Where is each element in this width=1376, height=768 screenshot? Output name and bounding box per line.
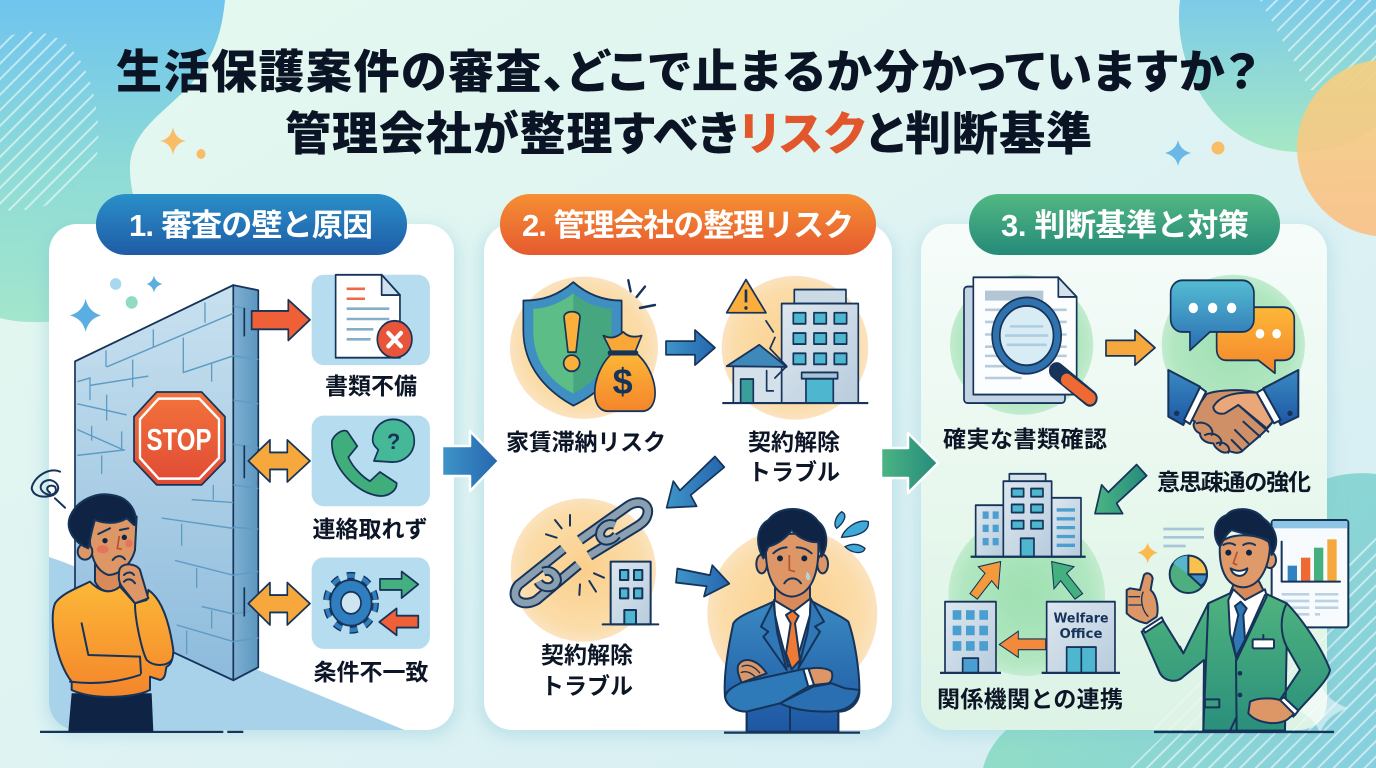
panel: 1 wall and causes [32,194,458,736]
decorative sparkles [160,127,1224,166]
double arrow: wall to phone [248,440,310,482]
label: 関係機関との連携: 関係機関との連携 [937,680,1123,714]
label: 連絡取れず: 連絡取れず [312,510,428,544]
worried manager [707,509,877,733]
wall with stop sign: STOP [146,422,211,457]
heading pill 2 [500,194,876,255]
worried person [32,470,173,732]
heading pill 2: 2. 管理会社の整理リスク [522,208,854,243]
icon: gear and arrows [312,557,430,649]
arrow: to worried manager [676,565,729,597]
label: 確実な書類確認: 確実な書類確認 [943,420,1107,454]
arrow: wall to document [252,300,310,340]
arrow [666,330,715,365]
label: 家賃滞納リスク: 家賃滞納リスク [506,423,666,457]
arrow: diagonal [667,456,724,508]
title: 生活保護案件の審査、どこで止まるか分かっていますか？ [116,36,1258,102]
title: 管理会社が整理すべきリスクと判断基準 [285,98,1092,164]
icon: speech bubbles [1162,275,1305,415]
panel sparkles [70,276,163,332]
arrow: diagonal green [1095,465,1147,514]
label: 契約解除トラブル (upper): 契約解除 [748,423,840,457]
label: 契約解除トラブル (lower): トラブル [541,667,633,701]
icon: cooperating organisations [940,474,1120,676]
icon: phone: ? [387,429,400,454]
label: 書類不備: 書類不備 [325,367,417,401]
icon: shield and money bag: $ [613,361,633,402]
icon: cooperating organisations: Office [1059,627,1103,642]
wall with stop sign [40,285,258,732]
panel: 3 criteria and measures [917,194,1348,736]
double arrow: wall to gear [248,583,310,625]
label: 意思疎通の強化: 意思疎通の強化 [1157,463,1311,497]
icon: missing document [312,275,430,365]
icon: shield and money bag [510,277,658,419]
icon: damaged house and building [722,276,868,420]
icon: cooperating organisations: Welfare [1053,612,1109,627]
label: 契約解除トラブル (lower) [541,636,633,701]
heading pill 1 [96,194,407,255]
label: 条件不一致: 条件不一致 [314,653,428,687]
label: 契約解除トラブル (lower): 契約解除 [541,636,633,670]
label: 契約解除トラブル (upper) [748,423,840,487]
confident adviser with chart [1127,509,1348,732]
label: 契約解除トラブル (upper): トラブル [748,453,840,487]
arrow: panel 1 to 2 [442,431,499,491]
heading pill 3 [969,194,1280,255]
heading pill 1: 1. 審査の壁と原因 [129,208,373,243]
panel: 2 risks [480,194,896,736]
icon: phone [312,416,430,506]
title [116,36,1258,164]
arrow: panel 2 to 3 [881,433,938,493]
heading pill 3: 3. 判断基準と対策 [1001,208,1249,243]
icon: document and magnifier [950,275,1093,415]
icon: handshake [1168,370,1298,453]
arrow [1106,330,1155,365]
icon: broken chain [511,498,658,642]
